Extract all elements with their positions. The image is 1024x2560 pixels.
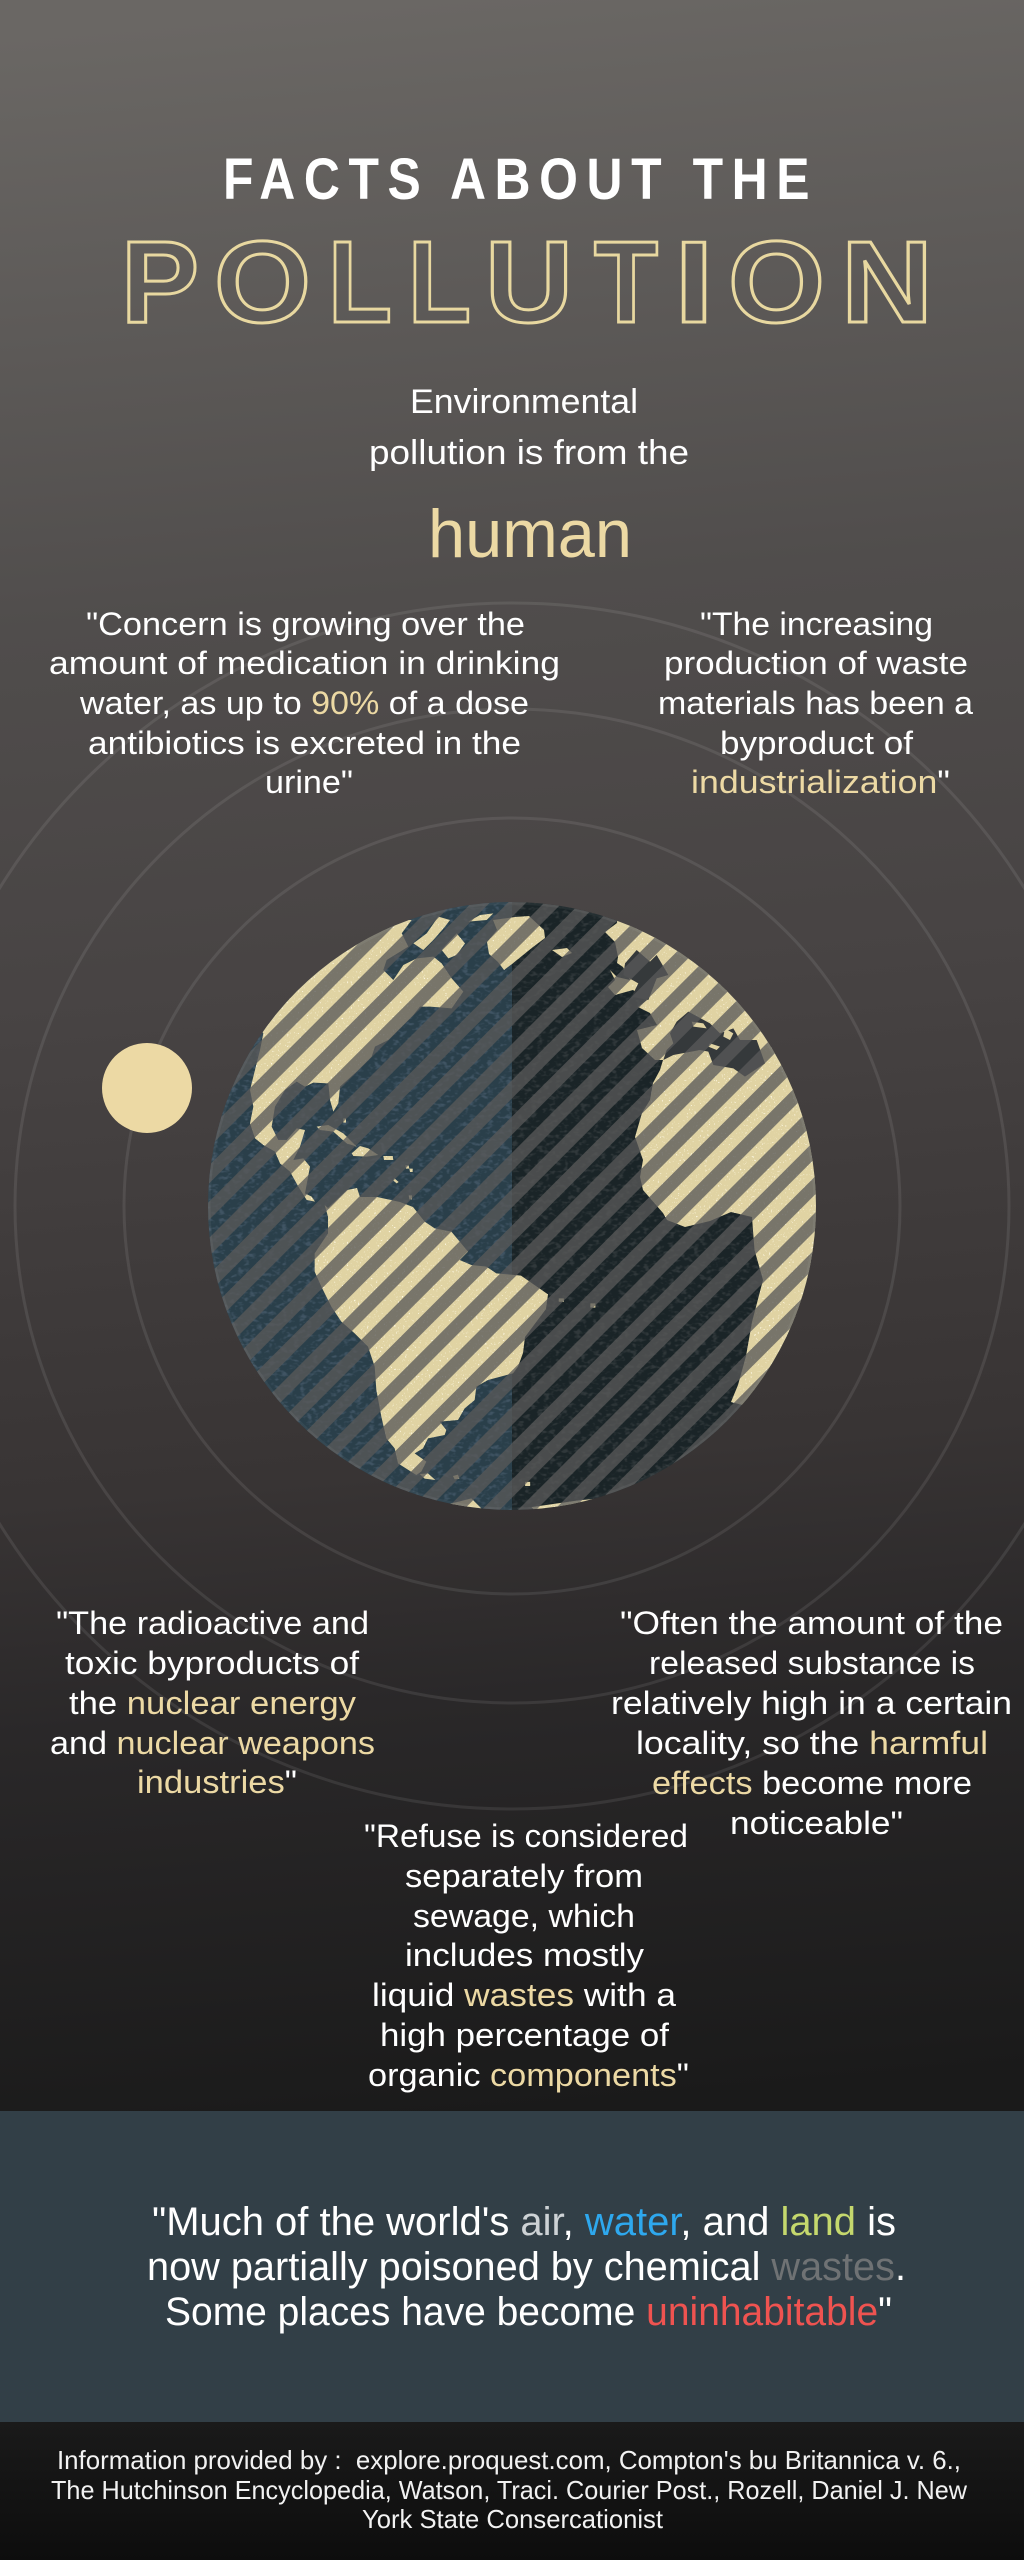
quote: refuse and sewage: organic components " [368, 2057, 689, 2093]
icon: sun [102, 1043, 192, 1133]
quote: harmful effects: "Often the amount of the [620, 1605, 1003, 1641]
quote: medication: urine" [265, 764, 353, 800]
quote: harmful effects: relatively high in a certain [611, 1685, 1012, 1721]
heading: facts about the: FACTS ABOUT THE [223, 148, 810, 212]
quote: industrialization: materials has been a [658, 685, 973, 721]
quote: harmful effects [611, 1605, 1012, 1841]
quote: radioactive: industries " [137, 1764, 297, 1800]
quote: industrialization: byproduct of [720, 725, 913, 761]
panel: closing quote: now partially poisoned by chemical wastes. [147, 2245, 906, 2289]
panel: closing quote: Some places have become uninhabitable" [165, 2290, 892, 2334]
heading: pollution outlined: I [674, 217, 714, 347]
footer: sources: The Hutchinson Encyclopedia, Watson, Traci. Courier Post., Rozell, Daniel J. New [51, 2475, 967, 2505]
footer: sources [0, 2422, 1024, 2560]
heading: pollution outlined: U [485, 217, 573, 347]
globe rim [208, 902, 741, 1510]
quote: radioactive: and nuclear weapons [50, 1725, 375, 1761]
quote: medication: water, as up to 90% of a dose [79, 685, 529, 721]
heading: pollution outlined: N [841, 217, 933, 347]
quote: refuse and sewage: sewage, which [413, 1898, 635, 1934]
panel: closing quote [0, 2111, 1024, 2422]
footer: sources: Information provided by : explore.proquest.com, Compton's bu Britannica v. 6., [57, 2445, 961, 2475]
continents [208, 902, 816, 1510]
quote: refuse and sewage: high percentage of [380, 2017, 669, 2053]
quote: radioactive: toxic byproducts of [65, 1645, 359, 1681]
heading: pollution outlined: O [728, 217, 825, 347]
quote: medication: antibiotics is excreted in the [88, 725, 521, 761]
quote: harmful effects: locality, so the harmful [636, 1725, 988, 1761]
quote: industrialization [658, 606, 973, 800]
ocean left half [208, 902, 512, 1510]
quote: radioactive: the nuclear energy [69, 1685, 356, 1721]
quote: refuse and sewage [364, 1818, 689, 2093]
quote: harmful effects: released substance is [649, 1645, 975, 1681]
quote: refuse and sewage: separately from [405, 1858, 643, 1894]
quote: industrialization: "The increasing [700, 606, 933, 642]
quote: harmful effects: effects become more [652, 1765, 972, 1801]
heading: pollution outlined: T [594, 217, 658, 347]
quote: medication: "Concern is growing over the [86, 606, 525, 642]
diagonal stripes overlay [200, 895, 825, 1520]
quote: refuse and sewage: "Refuse is considered [364, 1818, 688, 1854]
ocean texture right [512, 903, 759, 1510]
seas over land [623, 950, 765, 1077]
heading: pollution outlined [121, 217, 933, 347]
quote: refuse and sewage: liquid wastes with a [372, 1977, 676, 2013]
orbit rings [0, 603, 1024, 1809]
footer: sources: York State Consercationist [362, 2504, 664, 2534]
quote: refuse and sewage: includes mostly [405, 1937, 644, 1973]
quote: medication: amount of medication in drinking [49, 645, 560, 681]
highlight word: human: human [428, 496, 632, 572]
quote: radioactive [50, 1605, 375, 1800]
quote: harmful effects: noticeable" [730, 1805, 903, 1841]
ocean texture left [208, 902, 512, 1510]
intro text: Environmental [410, 383, 638, 421]
quote: industrialization: production of waste [664, 645, 968, 681]
heading: pollution outlined: P [121, 217, 199, 347]
heading: pollution outlined: L [408, 217, 471, 347]
quote: industrialization: industrialization " [691, 764, 950, 800]
ocean right half [512, 902, 816, 1510]
globe [200, 895, 825, 1520]
quote: medication [49, 606, 560, 800]
intro text: pollution is from the [369, 434, 689, 472]
panel: closing quote: "Much of the world's air, water, and land is [152, 2200, 896, 2244]
heading: pollution outlined: O [214, 217, 311, 347]
heading: pollution outlined: L [328, 217, 392, 347]
land speckle [208, 902, 816, 1510]
intro text [369, 383, 689, 472]
quote: radioactive: "The radioactive and [56, 1605, 369, 1641]
